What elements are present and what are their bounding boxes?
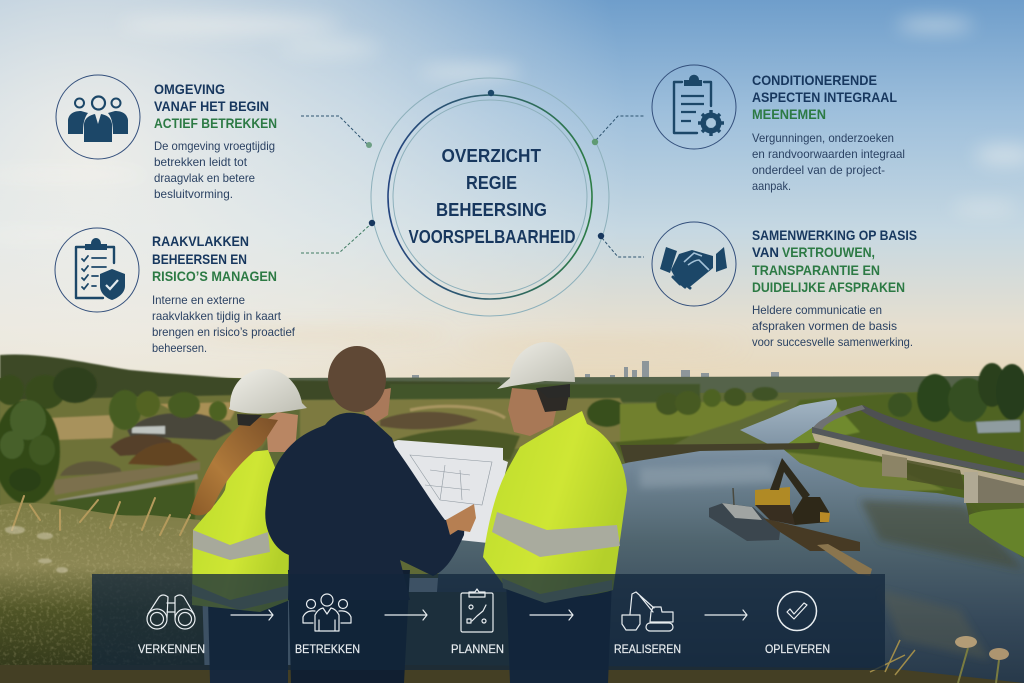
woman's helmet: [229, 369, 307, 414]
motorway bridge: [812, 405, 1024, 503]
man with yellow jacket: [483, 342, 627, 683]
arrow 1: [231, 610, 273, 620]
body: samenwerking: Heldere communicatie en: [752, 303, 882, 317]
heading: conditionerende aspecten: [752, 72, 897, 122]
centre text: REGIE: [466, 173, 517, 193]
body: conditionerende aspecten: [752, 131, 905, 193]
step: verkennen: [138, 595, 205, 656]
step: verkennen: VERKENNEN: [138, 642, 205, 656]
foreground bottom strip: [0, 636, 1024, 683]
body: samenwerking: [752, 303, 913, 349]
body: conditionerende aspecten: Vergunningen, onderzoeken: [752, 131, 894, 145]
step: betrekken: [295, 594, 360, 656]
heading: samenwerking: SAMENWERKING OP BASIS: [752, 227, 917, 243]
plan sheet: [385, 440, 508, 543]
centre text: [408, 146, 576, 247]
body: conditionerende aspecten: en randvoorwaarden integraal: [752, 147, 905, 161]
step: opleveren: OPLEVEREN: [765, 642, 830, 656]
arrow 4: [705, 610, 747, 620]
body: omgeving: betrekken leidt tot: [154, 155, 248, 169]
heading: samenwerking: [752, 227, 917, 295]
centre text: BEHEERSING: [436, 200, 547, 220]
step: plannen: [451, 589, 504, 656]
distant land and skyline: [0, 354, 1024, 578]
heading: samenwerking: DUIDELIJKE AFSPRAKEN: [752, 279, 905, 295]
body: conditionerende aspecten: aanpak.: [752, 179, 791, 193]
body: raakvlakken: beheersen.: [152, 341, 207, 355]
body: samenwerking: afspraken vormen de basis: [752, 319, 897, 333]
icon: document with gear: [652, 65, 736, 149]
body: conditionerende aspecten: onderdeel van de project-: [752, 163, 885, 177]
step: opleveren: [765, 592, 830, 656]
middle fields: [300, 387, 790, 462]
foreground meadow left: [0, 496, 205, 683]
left fields and earth works: [0, 395, 280, 530]
heading: omgeving: VANAF HET BEGIN: [154, 98, 269, 114]
heading: raakvlakken: RISICO’S MANAGEN: [152, 268, 277, 284]
barge with excavators: [709, 458, 872, 576]
heading: raakvlakken: RAAKVLAKKEN: [152, 233, 249, 249]
man in dark jacket: [265, 346, 476, 683]
body: raakvlakken: raakvlakken tijdig in kaart: [152, 309, 282, 323]
centre text: VOORSPELBAARHEID: [408, 227, 576, 247]
body: raakvlakken: brengen en risico’s proactief: [152, 325, 296, 339]
heading: raakvlakken: BEHEERSEN EN: [152, 251, 247, 267]
centre text: OVERZICHT: [442, 146, 541, 166]
right land, trees and buildings: [767, 363, 1024, 560]
step: realiseren: REALISEREN: [614, 642, 681, 656]
centre circle graphic: [366, 78, 609, 316]
heading: conditionerende aspecten: CONDITIONERENDE: [752, 72, 877, 88]
man's helmet: [497, 342, 575, 389]
grassy bank bottom right: [969, 508, 1024, 557]
heading: samenwerking: VERTROUWEN,: [782, 244, 875, 260]
people reading the plan: [190, 342, 627, 683]
arrow 3: [530, 610, 573, 620]
river reflections: [640, 464, 1024, 660]
arrow 2: [385, 610, 427, 620]
causeway: [620, 443, 820, 463]
step: plannen: PLANNEN: [451, 642, 504, 656]
heading: omgeving: ACTIEF BETREKKEN: [154, 115, 277, 131]
body: omgeving: draagvlak en betere: [154, 171, 255, 185]
body: omgeving: De omgeving vroegtijdig: [154, 139, 275, 153]
reeds behind the men: [405, 592, 515, 683]
icon: checklist with shield: [55, 228, 139, 312]
step: realiseren: [614, 592, 681, 656]
heading: conditionerende aspecten: MEENEMEN: [752, 106, 826, 122]
step: betrekken: BETREKKEN: [295, 642, 360, 656]
heading: samenwerking: VAN: [752, 244, 779, 260]
heading: conditionerende aspecten: ASPECTEN INTEGRAAL: [752, 89, 897, 105]
icon: handshake: [652, 222, 736, 306]
heading: omgeving: [154, 81, 277, 131]
body: raakvlakken: [152, 293, 296, 355]
heading: omgeving: OMGEVING: [154, 81, 225, 97]
body: raakvlakken: Interne en externe: [152, 293, 245, 307]
heading: samenwerking: TRANSPARANTIE EN: [752, 262, 880, 278]
trees on the left: [0, 367, 227, 504]
sky: [0, 0, 1024, 385]
river: [430, 399, 1024, 683]
body: samenwerking: voor succesvelle samenwerking.: [752, 335, 913, 349]
process band: [92, 574, 885, 670]
icon: team: [56, 75, 140, 159]
body: omgeving: besluitvorming.: [154, 187, 233, 201]
woman with helmet: [190, 369, 307, 683]
heading: raakvlakken: [152, 233, 277, 284]
dashed connectors: [301, 116, 645, 257]
body: omgeving: [154, 139, 275, 201]
